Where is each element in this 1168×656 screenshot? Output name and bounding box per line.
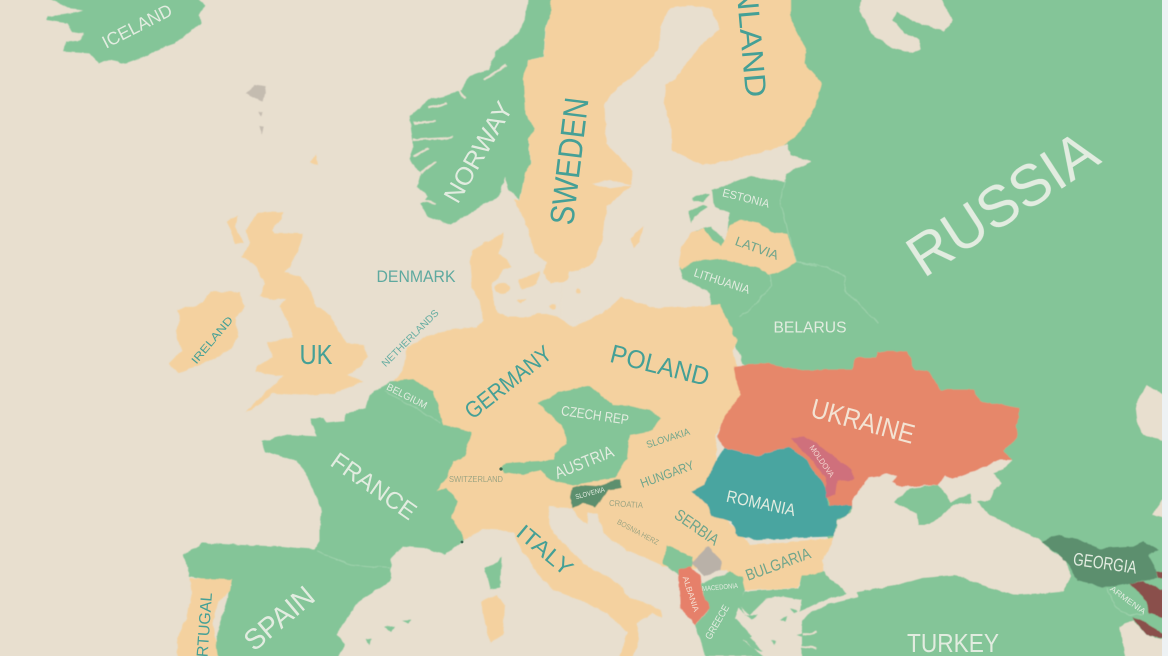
label: Croatia: CROATIA — [609, 498, 644, 510]
label: Germany: GERMANY — [459, 340, 557, 424]
Sardinia — [482, 595, 505, 643]
label: Belgium: BELGIUM — [384, 382, 429, 412]
label: Latvia: LATVIA — [733, 233, 781, 263]
Thrace — [738, 572, 847, 615]
Norway — [410, 0, 551, 225]
Turkish Aegean inlets — [802, 632, 817, 648]
Romania — [691, 446, 852, 540]
label: Bosnia Herzegovina: BOSNIA HERZ — [616, 517, 661, 547]
Corsica — [485, 556, 502, 590]
Nakhchivan — [1132, 617, 1165, 638]
France, Belgium and Spain — [177, 380, 505, 656]
Hebrides — [227, 215, 243, 243]
label: Switzerland: SWITZERLAND — [449, 474, 503, 484]
Liechtenstein dot — [499, 467, 503, 471]
label: Lithuania: LITHUANIA — [692, 266, 752, 297]
label: Austria: AUSTRIA — [552, 442, 617, 483]
Adriatic Balkans: Montenegro, Kosovo, Albania — [662, 385, 1168, 625]
label: Denmark: DENMARK — [376, 267, 456, 286]
Germany, Denmark, Poland, Switzerland, Italy and central Balkans — [390, 233, 836, 656]
Latvia, Estonian islands and Baltic borders — [678, 180, 817, 317]
Belarus eastern border — [796, 262, 878, 323]
label: Iceland: ICELAND — [99, 0, 176, 52]
label: Sweden: SWEDEN — [543, 95, 597, 227]
Faroe Islands — [246, 85, 266, 134]
label: Georgia: GEORGIA — [1072, 549, 1138, 578]
label: Hungary: HUNGARY — [638, 457, 696, 491]
Albania — [678, 566, 710, 625]
label: Serbia: SERBIA — [671, 507, 722, 549]
label: Armenia: ARMENIA — [1108, 584, 1148, 617]
Moldova — [791, 436, 854, 498]
label: Norway: NORWAY — [439, 97, 519, 208]
United Kingdom and Ireland — [168, 212, 368, 412]
Azerbaijan — [1130, 582, 1165, 618]
label: Moldova: MOLDOVA — [807, 443, 836, 479]
Russia, Belarus, Baltics and Turkey base landmass — [677, 0, 1168, 656]
label: Italy: ITALY — [512, 519, 578, 581]
Sweden and Finland — [514, 0, 822, 283]
Crimea — [893, 485, 972, 525]
Saaremaa — [688, 205, 708, 223]
Caspian patch, lower — [1152, 491, 1168, 520]
label: Slovakia: SLOVAKIA — [645, 427, 692, 451]
Gotland — [631, 227, 644, 248]
sea, south-east corner — [1120, 620, 1165, 656]
label: Estonia: ESTONIA — [721, 187, 771, 211]
label: France: FRANCE — [326, 448, 421, 526]
label: Ireland: IRELAND — [189, 314, 236, 367]
label: Belarus: BELARUS — [774, 320, 846, 337]
label: Netherlands: NETHERLANDS — [380, 308, 442, 369]
label: Greece: GREECE — [704, 603, 732, 642]
Georgia, Azerbaijan and east Turkey coast — [1042, 535, 1165, 656]
Baltic Sea — [562, 0, 953, 320]
Balkans: Greece and Macedonia — [695, 572, 847, 656]
label: Albania: ALBANIA — [681, 575, 701, 614]
Aegean islands — [742, 608, 817, 652]
Iceland — [45, 0, 205, 63]
Swedish lake — [591, 180, 632, 188]
Ukraine — [691, 351, 1019, 540]
Baltic and Belarus borders — [740, 180, 817, 317]
Portugal — [177, 578, 232, 656]
label: Czech Republic: CZECH REP — [560, 402, 630, 428]
label: UK: UK — [300, 339, 333, 370]
label: Poland: POLAND — [607, 338, 713, 392]
label: Bulgaria: BULGARIA — [744, 545, 813, 585]
White Sea — [860, 0, 953, 53]
right margin strip — [1162, 0, 1168, 656]
Czech Republic and Austria — [500, 386, 660, 485]
Slovenia — [570, 479, 623, 508]
Norwegian fjords — [413, 65, 506, 203]
Monaco dot — [461, 541, 463, 543]
Armenia border — [1107, 588, 1143, 615]
label: Spain: SPAIN — [238, 580, 321, 656]
label: Slovenia: SLOVENIA — [575, 487, 606, 501]
Ireland — [168, 292, 245, 373]
label: Russia: RUSSIA — [895, 118, 1110, 289]
Balearic Islands — [367, 621, 412, 645]
label: Macedonia: MACEDONIA — [702, 583, 739, 593]
Estonian islands — [692, 193, 710, 202]
label: Romania: ROMANIA — [725, 487, 798, 520]
Kosovo — [691, 546, 723, 576]
label: Ukraine: UKRAINE — [808, 393, 918, 450]
Shetland — [310, 154, 318, 165]
Caspian patch, upper — [1136, 385, 1168, 441]
Spain and Belgium borders — [317, 391, 440, 568]
Danish islands — [495, 272, 581, 310]
Black Sea and Sea of Azov — [826, 460, 1071, 595]
Azerbaijan north-east fragment — [1157, 572, 1165, 578]
